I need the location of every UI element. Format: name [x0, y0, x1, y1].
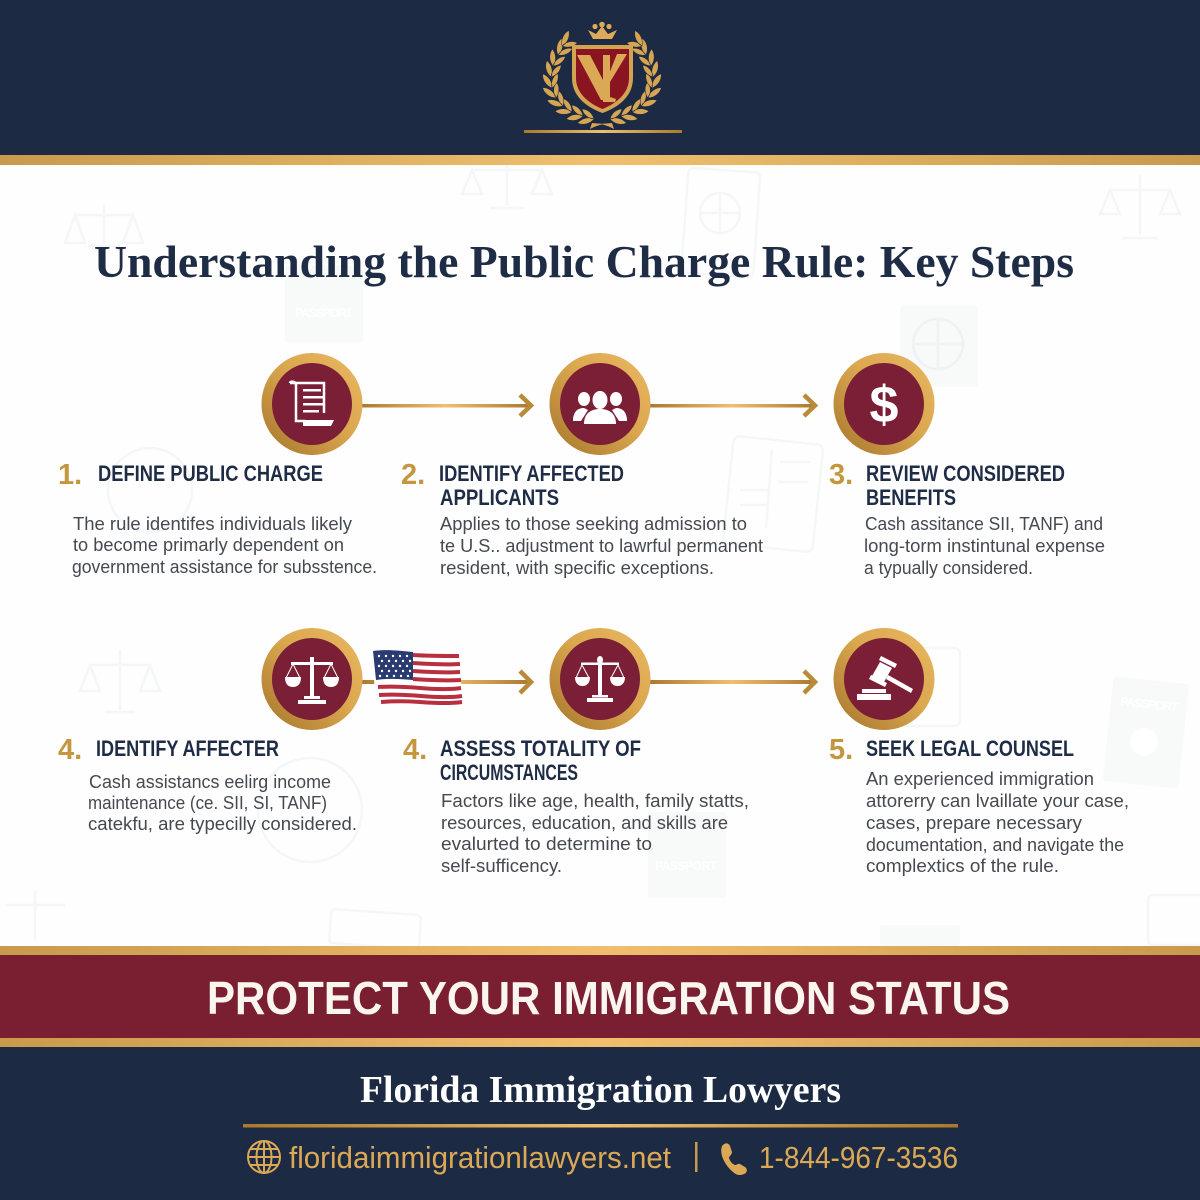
firm name: Florida Immigration Lowyers	[360, 1069, 841, 1111]
watermark background icons: PASSPORT	[1120, 694, 1180, 714]
logo emblem	[524, 22, 682, 133]
shield	[572, 45, 633, 113]
step 5: ASSESS TOTALITY OF	[440, 736, 641, 761]
arrow 5 to 6	[650, 671, 815, 693]
emblem rule	[524, 130, 682, 133]
header band	[0, 0, 1200, 165]
step 3: BENEFITS	[866, 485, 956, 510]
step 5: Factors like age, health, family statts,	[441, 790, 749, 811]
step 5: evalurted to determine to	[441, 833, 652, 854]
step 1: The rule identifes individuals likely	[73, 513, 353, 534]
icon: justice scales	[550, 628, 650, 730]
step 1	[58, 459, 377, 577]
step 6: complextics of the rule.	[866, 855, 1059, 876]
website: floridaimmigrationlawyers.net	[289, 1140, 671, 1175]
icon: US flag	[373, 650, 462, 705]
step 3: long-torm instintunal expense	[864, 535, 1105, 556]
arrow 2 to 3	[650, 395, 815, 416]
title: Understanding the Public Charge Rule: Key Steps	[94, 236, 1074, 287]
icon: document scroll	[262, 353, 362, 455]
right laurel	[600, 30, 662, 129]
step 6: An experienced immigration	[866, 768, 1094, 789]
step 2: 2.	[401, 459, 425, 491]
step 1: DEFINE PUBLIC CHARGE	[98, 461, 323, 486]
step 6: cases, prepare necessary	[866, 812, 1083, 833]
watermark background icons: PASSPORT	[295, 306, 354, 320]
step 1: government assistance for subsstence.	[72, 556, 377, 577]
step 5: CIRCUMSTANCES	[440, 760, 578, 785]
step 1: to become primarly dependent on	[73, 534, 344, 555]
step 6: SEEK LEGAL COUNSEL	[866, 736, 1074, 761]
step 3: 3.	[829, 459, 853, 491]
icon: gavel	[834, 628, 934, 730]
step 3	[829, 459, 1105, 578]
step 4	[58, 734, 357, 834]
icon: globe	[248, 1141, 280, 1173]
arrow 4 to 5	[360, 671, 531, 693]
step 2	[401, 459, 763, 578]
call-to-action banner: PROTECT YOUR IMMIGRATION STATUS	[207, 972, 1010, 1024]
step 6: documentation, and navigate the	[866, 834, 1124, 855]
step 5: self-sufficency.	[441, 855, 562, 876]
step 4: Cash assistancs eelirg income	[89, 771, 331, 792]
icon: dollar sign	[834, 353, 934, 455]
left laurel	[542, 30, 604, 129]
phone number: 1-844-967-3536	[759, 1140, 958, 1175]
step 5: resources, education, and skills are	[441, 812, 728, 833]
step 1: 1.	[58, 459, 82, 491]
crown	[588, 22, 617, 39]
footer rule	[243, 1124, 958, 1128]
icon: people group	[550, 353, 650, 455]
step 3: a typually considered.	[864, 557, 1033, 578]
arrow 1 to 2	[360, 395, 531, 416]
step 3: Cash assitance SII, TANF) and	[865, 513, 1103, 534]
step 2: IDENTIFY AFFECTED	[439, 461, 624, 486]
step 3: REVIEW CONSIDERED	[866, 461, 1065, 486]
step 2: te U.S.. adjustment to lawrful permanent	[440, 535, 763, 556]
step 2: resident, with specific exceptions.	[440, 557, 714, 578]
monogram	[577, 54, 627, 102]
icon: balance scales	[262, 628, 362, 730]
step 6	[829, 734, 1129, 876]
step 2: APPLICANTS	[440, 485, 559, 510]
step 4: 4.	[58, 734, 82, 766]
gold strip below header	[0, 155, 1200, 165]
icon: dollar sign: $	[870, 376, 899, 434]
step 4: catekfu, are typecilly considered.	[88, 813, 357, 834]
step 6: attorerry can lvaillate your case,	[866, 790, 1129, 811]
step 6: 5.	[829, 734, 853, 766]
watermark background icons	[5, 160, 1200, 949]
watermark background icons: PASSPORT	[655, 859, 718, 873]
step 5	[403, 734, 749, 876]
footer band	[0, 1047, 1200, 1200]
step 2: Applies to those seeking admission to	[440, 513, 747, 534]
step 4: IDENTIFY AFFECTER	[96, 736, 279, 761]
icon: phone	[721, 1143, 747, 1175]
step 5: 4.	[403, 734, 427, 766]
step 4: maintenance (ce. SII, SI, TANF)	[88, 792, 327, 813]
call-to-action banner	[0, 946, 1200, 1047]
separator	[695, 1142, 698, 1172]
